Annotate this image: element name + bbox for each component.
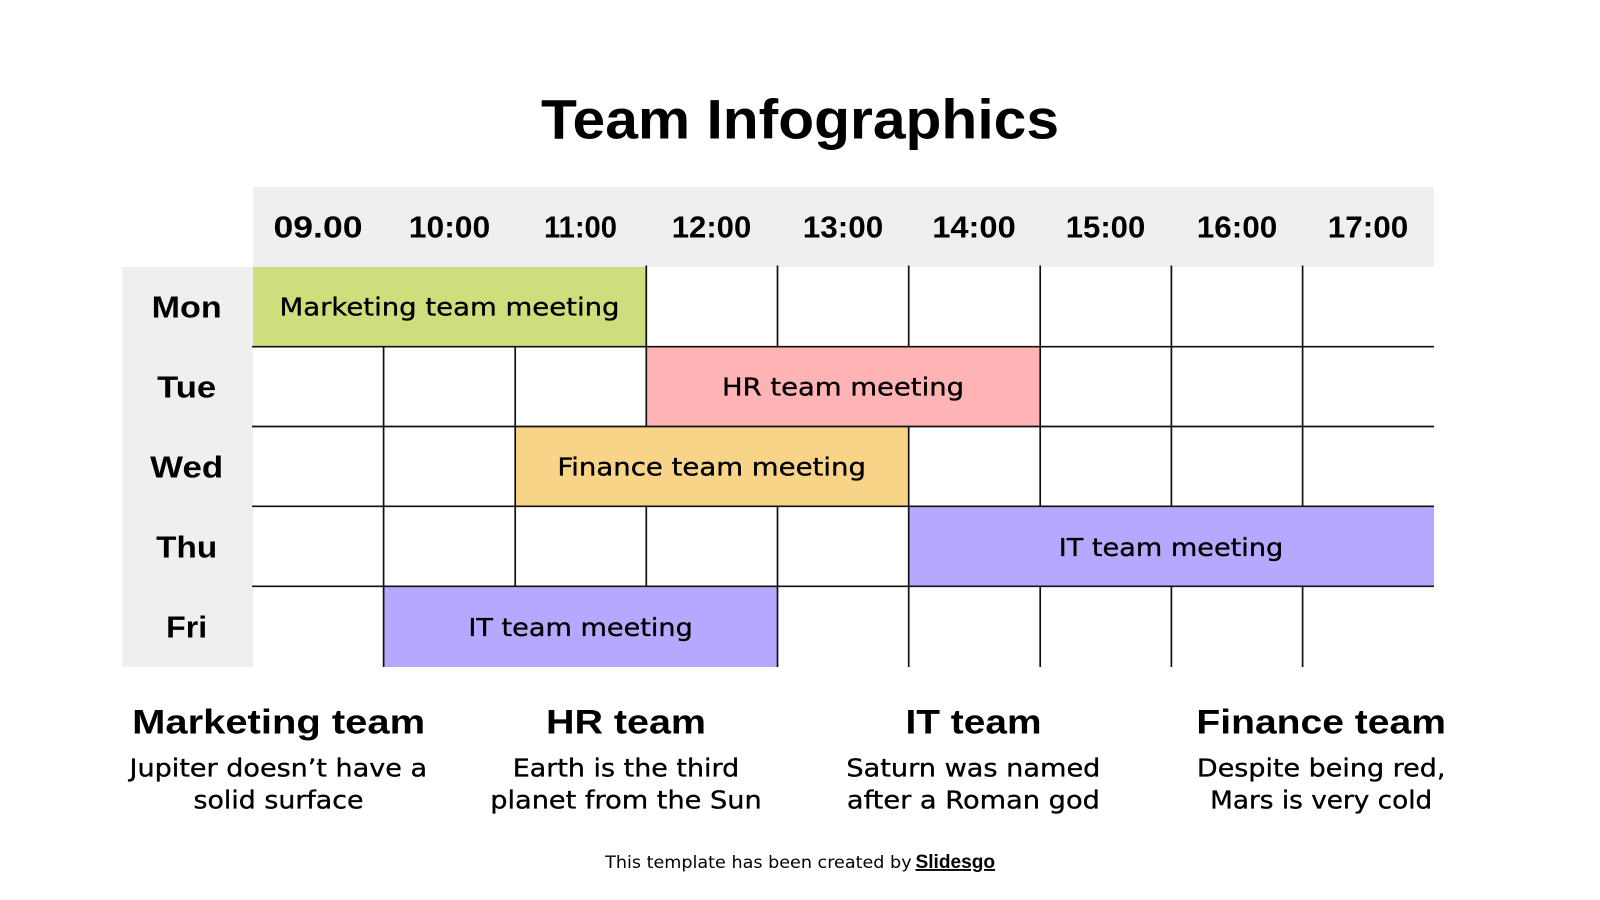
footer credit: This template has been created by: [604, 853, 912, 873]
legend: IT team: [846, 704, 1100, 814]
day column: Mon: [152, 290, 222, 324]
time header row: 17:00: [1328, 210, 1408, 244]
meeting: IT Friday: IT team meeting: [468, 613, 693, 642]
legend: HR team: Earth is the third: [513, 754, 739, 783]
day column: [122, 267, 253, 667]
meeting: Finance Wednesday: Finance team meeting: [557, 453, 866, 482]
legend: HR team: HR team: [546, 704, 706, 742]
meeting: HR Tuesday: HR team meeting: [722, 373, 964, 402]
legend: Marketing team: Jupiter doesn’t have a: [127, 754, 427, 783]
time header row: 10:00: [409, 210, 490, 244]
meeting: IT Thursday: IT team meeting: [1059, 533, 1283, 562]
legend: HR team: planet from the Sun: [490, 785, 762, 814]
title: Team Infographics: [541, 88, 1059, 150]
day column: Tue: [157, 370, 216, 404]
time header row: 09.00: [274, 210, 362, 244]
time header row: 15:00: [1066, 210, 1145, 244]
legend: Marketing team: [127, 704, 427, 814]
time header row: 14:00: [932, 210, 1016, 244]
time header row: 13:00: [803, 210, 883, 244]
time header row: 12:00: [672, 210, 751, 244]
legend: IT team: after a Roman god: [847, 785, 1100, 814]
meeting: Finance Wednesday: [515, 426, 909, 506]
schedule grid lines: [252, 266, 1434, 667]
legend: Marketing team: Marketing team: [132, 704, 425, 742]
time header row: 11:00: [544, 210, 617, 244]
footer credit: Slidesgo: [916, 852, 995, 873]
day column: Thu: [156, 530, 217, 564]
day column: Fri: [166, 610, 207, 644]
legend: IT team: IT team: [906, 704, 1042, 742]
legend: Finance team: Finance team: [1196, 704, 1446, 742]
legend: Finance team: [1196, 704, 1446, 814]
time header row: 16:00: [1197, 210, 1277, 244]
legend: IT team: Saturn was named: [846, 754, 1100, 783]
legend: Finance team: Despite being red,: [1197, 754, 1445, 783]
legend: Marketing team: solid surface: [194, 785, 364, 814]
meeting: Marketing Monday: [253, 267, 646, 347]
meeting: IT Thursday: [909, 506, 1434, 586]
legend: HR team: [490, 704, 762, 814]
meeting: HR Tuesday: [646, 347, 1040, 426]
day column: Wed: [150, 450, 223, 484]
meeting: Marketing Monday: Marketing team meeting: [280, 293, 620, 322]
time header row: [253, 187, 1434, 267]
meeting: IT Friday: [384, 586, 778, 667]
legend: Finance team: Mars is very cold: [1210, 785, 1432, 814]
